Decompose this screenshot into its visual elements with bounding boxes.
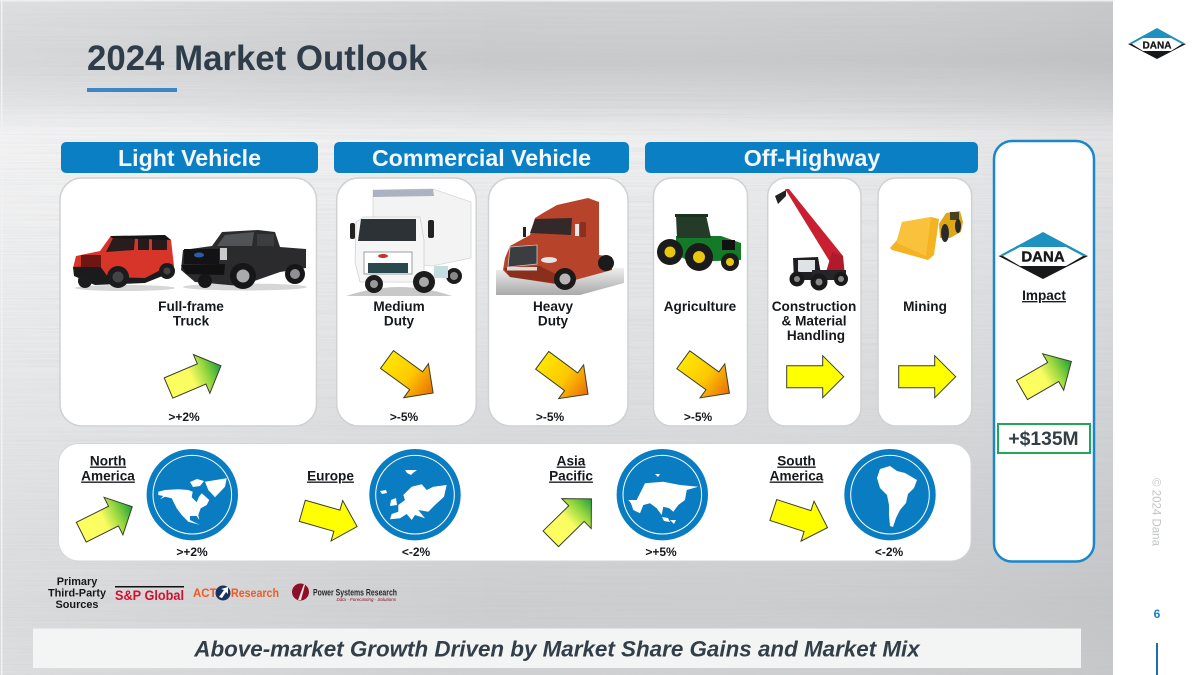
icon: red jeep (73, 235, 175, 291)
logo: Power Systems Research (292, 584, 397, 602)
logo: Power Systems Research: Power Systems Research (313, 588, 397, 598)
label: mining: Mining (903, 299, 947, 314)
region: Europe (297, 449, 461, 559)
label: Impact: Impact (1022, 288, 1066, 303)
value: >-5%: >-5% (536, 410, 564, 424)
label: construction and material handling: & Material (782, 314, 846, 328)
panel: construction and material handling (768, 178, 861, 426)
label: full-frame truck: Full-frame (158, 299, 224, 314)
label: agriculture: Agriculture (664, 299, 737, 314)
value: >+5%: >+5% (645, 545, 677, 559)
value: >+2%: >+2% (168, 410, 200, 424)
logo: Dana top right: DANA (1143, 40, 1171, 52)
arrow: flat right (899, 356, 956, 398)
icon: North America globe (147, 449, 238, 540)
value: >-5%: >-5% (390, 410, 418, 424)
icon: red semi truck (496, 198, 624, 295)
logo: Power Systems Research: Data · Forecasting · Solutions (336, 597, 397, 602)
icon: Europe globe (369, 449, 461, 540)
logo: S&P Global: S&P Global (115, 587, 184, 603)
region: Asia Pacific (536, 449, 708, 559)
callout: +$135M (998, 424, 1090, 453)
banner: conclusion (33, 628, 1081, 668)
region: South America (767, 449, 936, 559)
panel: Dana impact (994, 141, 1094, 562)
icon: white box truck (346, 189, 471, 296)
label: Asia Pacific: Pacific (549, 468, 593, 484)
copyright: © 2024 Dana (1150, 478, 1162, 547)
value: >+2%: >+2% (176, 545, 208, 559)
header: Light Vehicle: Light Vehicle (118, 145, 261, 171)
title: 2024 Market Outlook (87, 39, 428, 78)
page number: 6 (1154, 607, 1161, 621)
arrow: flat-down right (767, 490, 834, 548)
arrow: up-right (160, 346, 229, 407)
banner: conclusion: Above-market Growth Driven by Market Share Gains and Market Mix (193, 636, 921, 662)
label: heavy duty: Heavy (533, 299, 573, 314)
panel: full-frame truck (60, 178, 316, 426)
label: South America: South (777, 454, 816, 468)
label: North America: North (90, 454, 126, 468)
panel: agriculture (654, 178, 748, 426)
logo: ACT Research (193, 586, 279, 600)
header: Commercial Vehicle (334, 142, 629, 173)
value: <-2%: <-2% (402, 545, 430, 559)
region: North America (72, 449, 238, 559)
logo: Dana (998, 232, 1088, 279)
arrow: down-right (530, 343, 601, 411)
title underline (87, 88, 177, 92)
icon: Asia Pacific globe (617, 449, 708, 540)
sources label: Primary (57, 576, 97, 588)
header: Commercial Vehicle: Commercial Vehicle (372, 145, 591, 171)
icon: South America globe (844, 449, 936, 540)
label: medium duty: Duty (384, 314, 415, 328)
arrow: up-right (1012, 343, 1082, 408)
panel: mining (878, 178, 972, 426)
logo: ACT Research: Research (231, 588, 279, 600)
logo: ACT Research: ACT (193, 588, 217, 600)
label: heavy duty: Duty (538, 314, 569, 328)
label: Asia Pacific: Asia (557, 454, 586, 468)
panel: medium duty (337, 178, 476, 426)
label: construction and material handling: Construction (772, 299, 856, 314)
icon: mining loader (890, 211, 963, 260)
header: Off-Highway: Off-Highway (744, 145, 880, 171)
sources label: Third-Party (48, 588, 106, 600)
arrow: up-right (536, 484, 606, 554)
logo: Dana: DANA (1021, 248, 1065, 266)
label: North America: America (81, 468, 135, 484)
icon: green tractor (657, 214, 741, 271)
arrow: flat-down right (297, 491, 363, 547)
label: full-frame truck: Truck (173, 314, 210, 328)
arrow: down-right (375, 343, 445, 410)
value: >-5%: >-5% (684, 410, 712, 424)
header: Light Vehicle (61, 142, 318, 173)
callout: +$135M: +$135M (1008, 429, 1079, 450)
arrow: flat right (787, 356, 844, 398)
panel: heavy duty (488, 178, 628, 426)
header: Off-Highway (645, 142, 978, 173)
label: medium duty: Medium (373, 299, 425, 314)
value: <-2%: <-2% (875, 545, 903, 559)
logo: Dana top right (1128, 28, 1186, 59)
icon: telehandler (775, 189, 848, 290)
label: Europe: Europe (307, 468, 354, 484)
label: South America: America (770, 468, 824, 484)
label: construction and material handling: Handling (787, 328, 845, 343)
arrow: up-right (72, 488, 142, 551)
sources label: Sources (56, 599, 98, 611)
panel: regions (58, 444, 971, 561)
icon: black pickup (181, 230, 307, 290)
arrow: down-right (671, 343, 742, 410)
page marker line (1156, 643, 1158, 675)
